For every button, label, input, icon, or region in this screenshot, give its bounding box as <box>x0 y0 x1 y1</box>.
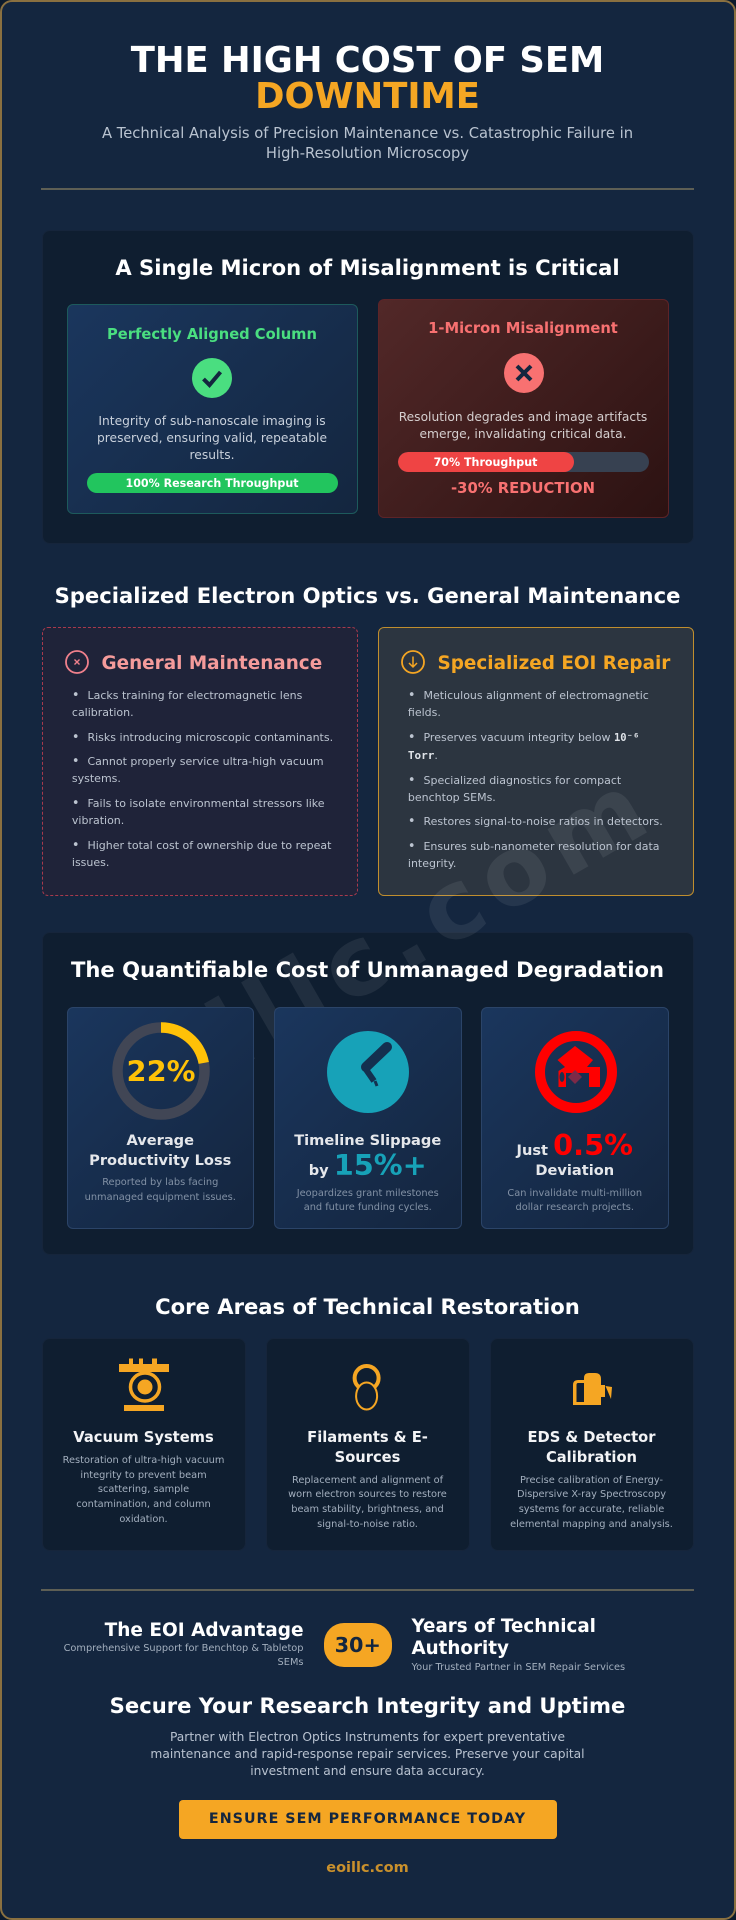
general maintenance list: • <box>72 688 80 703</box>
throughput bar 70% <box>398 452 648 472</box>
icon: check <box>192 358 232 398</box>
button: ensure SEM performance: ENSURE SEM PERFORMANCE TODAY <box>209 1810 526 1826</box>
stat note: dollar research projects. <box>515 1202 634 1213</box>
bar fill <box>398 452 574 472</box>
stat note <box>85 1177 236 1203</box>
authority heading <box>411 1616 596 1659</box>
stat value line: by 15%+ <box>309 1148 427 1182</box>
specialized repair list: Preserves vacuum integrity below 10⁻⁶ <box>423 730 639 744</box>
general maintenance list: • <box>72 730 80 744</box>
misaligned heading: 1-Micron Misalignment <box>428 320 618 337</box>
aligned heading: Perfectly Aligned Column <box>107 326 317 342</box>
stat note: Reported by labs facing <box>102 1177 218 1188</box>
card description <box>510 1474 673 1530</box>
card description: oxidation. <box>119 1514 168 1525</box>
specialized repair list: integrity. <box>408 857 456 870</box>
misaligned description: Resolution degrades and image artifacts <box>399 410 647 424</box>
specialized repair list: • <box>408 730 416 744</box>
badge: 30+ <box>324 1622 392 1666</box>
card description: Precise calibration of Energy- <box>520 1474 663 1486</box>
stat title: Productivity Loss <box>89 1152 231 1169</box>
card title: EDS & Detector <box>527 1429 656 1446</box>
specialized repair list: Restores signal-to-noise ratios in detectors. <box>423 815 663 828</box>
specialized repair heading: Specialized EOI Repair <box>438 652 670 674</box>
bar fill: 70% Throughput <box>434 456 537 468</box>
card description: beam stability, brightness, and <box>291 1504 444 1515</box>
subtitle <box>102 125 633 162</box>
stat title: Timeline Slippage <box>294 1132 441 1149</box>
reduction callout: -30% REDUCTION <box>451 480 595 496</box>
general maintenance list: • <box>72 838 80 852</box>
specialized repair list: • <box>408 838 416 854</box>
title: THE HIGH COST OF SEM <box>131 40 604 80</box>
stat title <box>89 1132 231 1169</box>
stat note <box>507 1188 642 1213</box>
card: perfectly aligned column <box>66 304 358 514</box>
stat value line: Just 0.5% <box>517 1128 633 1162</box>
general maintenance list: issues. <box>72 856 109 869</box>
misaligned description <box>399 410 647 441</box>
EOI advantage block <box>64 1620 304 1668</box>
specialized repair content <box>401 650 670 870</box>
advantage subtext: Comprehensive Support for Benchtop & Tabletop <box>64 1642 304 1654</box>
icon: filament rings <box>352 1364 381 1410</box>
specialized repair list: Ensures sub-nanometer resolution for data <box>423 840 660 852</box>
aligned description <box>97 414 327 462</box>
card title <box>527 1429 656 1466</box>
general maintenance list: calibration. <box>72 706 134 719</box>
card title: Calibration <box>546 1449 637 1466</box>
subtitle: High-Resolution Microscopy <box>266 145 469 162</box>
stat note: Can invalidate multi-million <box>507 1188 642 1198</box>
throughput bar 100% <box>86 473 338 493</box>
stat note: and future funding cycles. <box>304 1202 432 1213</box>
general maintenance list: Lacks training for electromagnetic lens <box>87 689 302 702</box>
donut chart 22%: 22% <box>126 1054 195 1088</box>
general maintenance content <box>65 650 333 869</box>
stat note: Jeopardizes grant milestones <box>297 1188 439 1198</box>
card description: worn electron sources to restore <box>288 1489 447 1500</box>
icon: detector <box>573 1373 612 1405</box>
general maintenance list: • <box>72 754 80 769</box>
heading: restoration: Core Areas of Technical Restoration <box>155 1294 580 1318</box>
aligned description: Integrity of sub-nanoscale imaging is <box>98 414 326 428</box>
stat card: deviation <box>481 1006 668 1228</box>
general maintenance list: Higher total cost of ownership due to repeat <box>87 838 331 852</box>
general maintenance heading: General Maintenance <box>102 652 322 674</box>
specialized repair list: Torr. <box>408 749 438 762</box>
icon: clock circle <box>327 1031 409 1113</box>
specialized repair list: fields. <box>408 706 441 719</box>
call to action paragraph: investment and ensure data accuracy. <box>250 1764 485 1778</box>
panel: misalignment background <box>42 230 694 544</box>
watermark: eoillc.com <box>58 746 673 1166</box>
stat card: timeline slippage <box>274 1006 462 1228</box>
card: specialized EOI repair background <box>378 626 694 896</box>
authority subtext: Your Trusted Partner in SEM Repair Services <box>412 1662 625 1673</box>
heading: quantifiable cost: The Quantifiable Cost of Unmanaged Degradation <box>71 957 664 982</box>
stat note: unmanaged equipment issues. <box>85 1192 236 1203</box>
specialized repair list: • <box>408 772 416 788</box>
donut chart 22% <box>112 1022 210 1120</box>
card title: Vacuum Systems <box>73 1429 214 1446</box>
badge: 30+: 30+ <box>335 1632 381 1656</box>
card description: scattering, sample <box>98 1484 189 1495</box>
subtitle: A Technical Analysis of Precision Maintenance vs. Catastrophic Failure in <box>102 125 633 142</box>
website link: eoillc.com <box>326 1860 409 1876</box>
general maintenance list: Cannot properly service ultra-high vacuum <box>87 755 324 768</box>
aligned description: preserved, ensuring valid, repeatable <box>97 431 327 445</box>
stat title: Deviation <box>535 1162 614 1178</box>
call to action paragraph <box>150 1730 585 1778</box>
general maintenance list: Risks introducing microscopic contaminants. <box>87 730 333 744</box>
general maintenance list <box>72 688 333 869</box>
authority heading: Authority <box>412 1638 509 1659</box>
stat note <box>296 1188 439 1213</box>
card title: Filaments & E- <box>307 1429 428 1446</box>
card: general maintenance <box>42 626 358 896</box>
specialized repair list: • <box>408 688 416 703</box>
aligned description: results. <box>190 448 234 462</box>
card description: contamination, and column <box>76 1499 211 1510</box>
card description <box>63 1455 224 1525</box>
general maintenance list: • <box>72 796 80 810</box>
title <box>130 40 604 117</box>
call to action paragraph: maintenance and rapid-response repair services. Preserve your capital <box>150 1747 585 1761</box>
card description: systems for accurate, reliable <box>519 1504 664 1515</box>
call to action paragraph: Partner with Electron Optics Instruments for expert preventative <box>170 1730 565 1744</box>
panel: cost background <box>42 932 694 1254</box>
icon: down arrow circle <box>401 650 425 674</box>
card description: integrity to prevent beam <box>80 1470 207 1481</box>
card title: Sources <box>335 1449 400 1466</box>
general maintenance list: Fails to isolate environmental stressors like <box>87 796 325 810</box>
card: 1-micron misalignment <box>378 298 668 518</box>
icon: cross <box>504 353 544 393</box>
icon: x circle <box>65 650 89 674</box>
icon: warning ring <box>535 1031 617 1113</box>
card: filaments <box>266 1338 470 1550</box>
heading: misalignment: A Single Micron of Misalignment is Critical <box>115 254 620 280</box>
card description: Restoration of ultra-high vacuum <box>63 1455 224 1466</box>
advantage heading: The EOI Advantage <box>105 1620 304 1641</box>
specialized repair list: benchtop SEMs. <box>408 791 496 804</box>
advantage subtext: SEMs <box>278 1657 304 1668</box>
specialized repair list <box>408 688 663 870</box>
heading: call to action: Secure Your Research Integrity and Uptime <box>110 1692 625 1718</box>
card title <box>307 1429 428 1466</box>
general maintenance list: vibration. <box>72 814 124 827</box>
card description: signal-to-noise ratio. <box>317 1519 418 1530</box>
stat title: Average <box>126 1132 194 1149</box>
specialized repair list: Specialized diagnostics for compact <box>423 774 621 786</box>
advantage subtext <box>64 1642 304 1668</box>
card description: Replacement and alignment of <box>292 1474 443 1486</box>
stat card: productivity loss <box>66 1006 254 1228</box>
misaligned description: emerge, invalidating critical data. <box>420 427 626 441</box>
specialized repair list: Meticulous alignment of electromagnetic <box>423 689 649 702</box>
title: DOWNTIME <box>255 76 480 117</box>
card: EDS calibration <box>490 1338 694 1550</box>
card description: elemental mapping and analysis. <box>510 1519 673 1530</box>
card description: Dispersive X-ray Spectroscopy <box>517 1489 666 1500</box>
card description <box>288 1474 447 1530</box>
throughput bar 100%: 100% Research Throughput <box>125 477 299 490</box>
specialized repair list: • <box>408 814 416 829</box>
authority heading: Years of Technical <box>412 1616 596 1637</box>
icon: vacuum <box>119 1358 169 1411</box>
button: ensure SEM performance <box>178 1800 556 1838</box>
card: vacuum systems <box>42 1338 246 1550</box>
years of authority block <box>411 1616 625 1673</box>
heading: comparison: Specialized Electron Optics vs. General Maintenance <box>55 582 680 608</box>
general maintenance list: systems. <box>72 772 121 785</box>
